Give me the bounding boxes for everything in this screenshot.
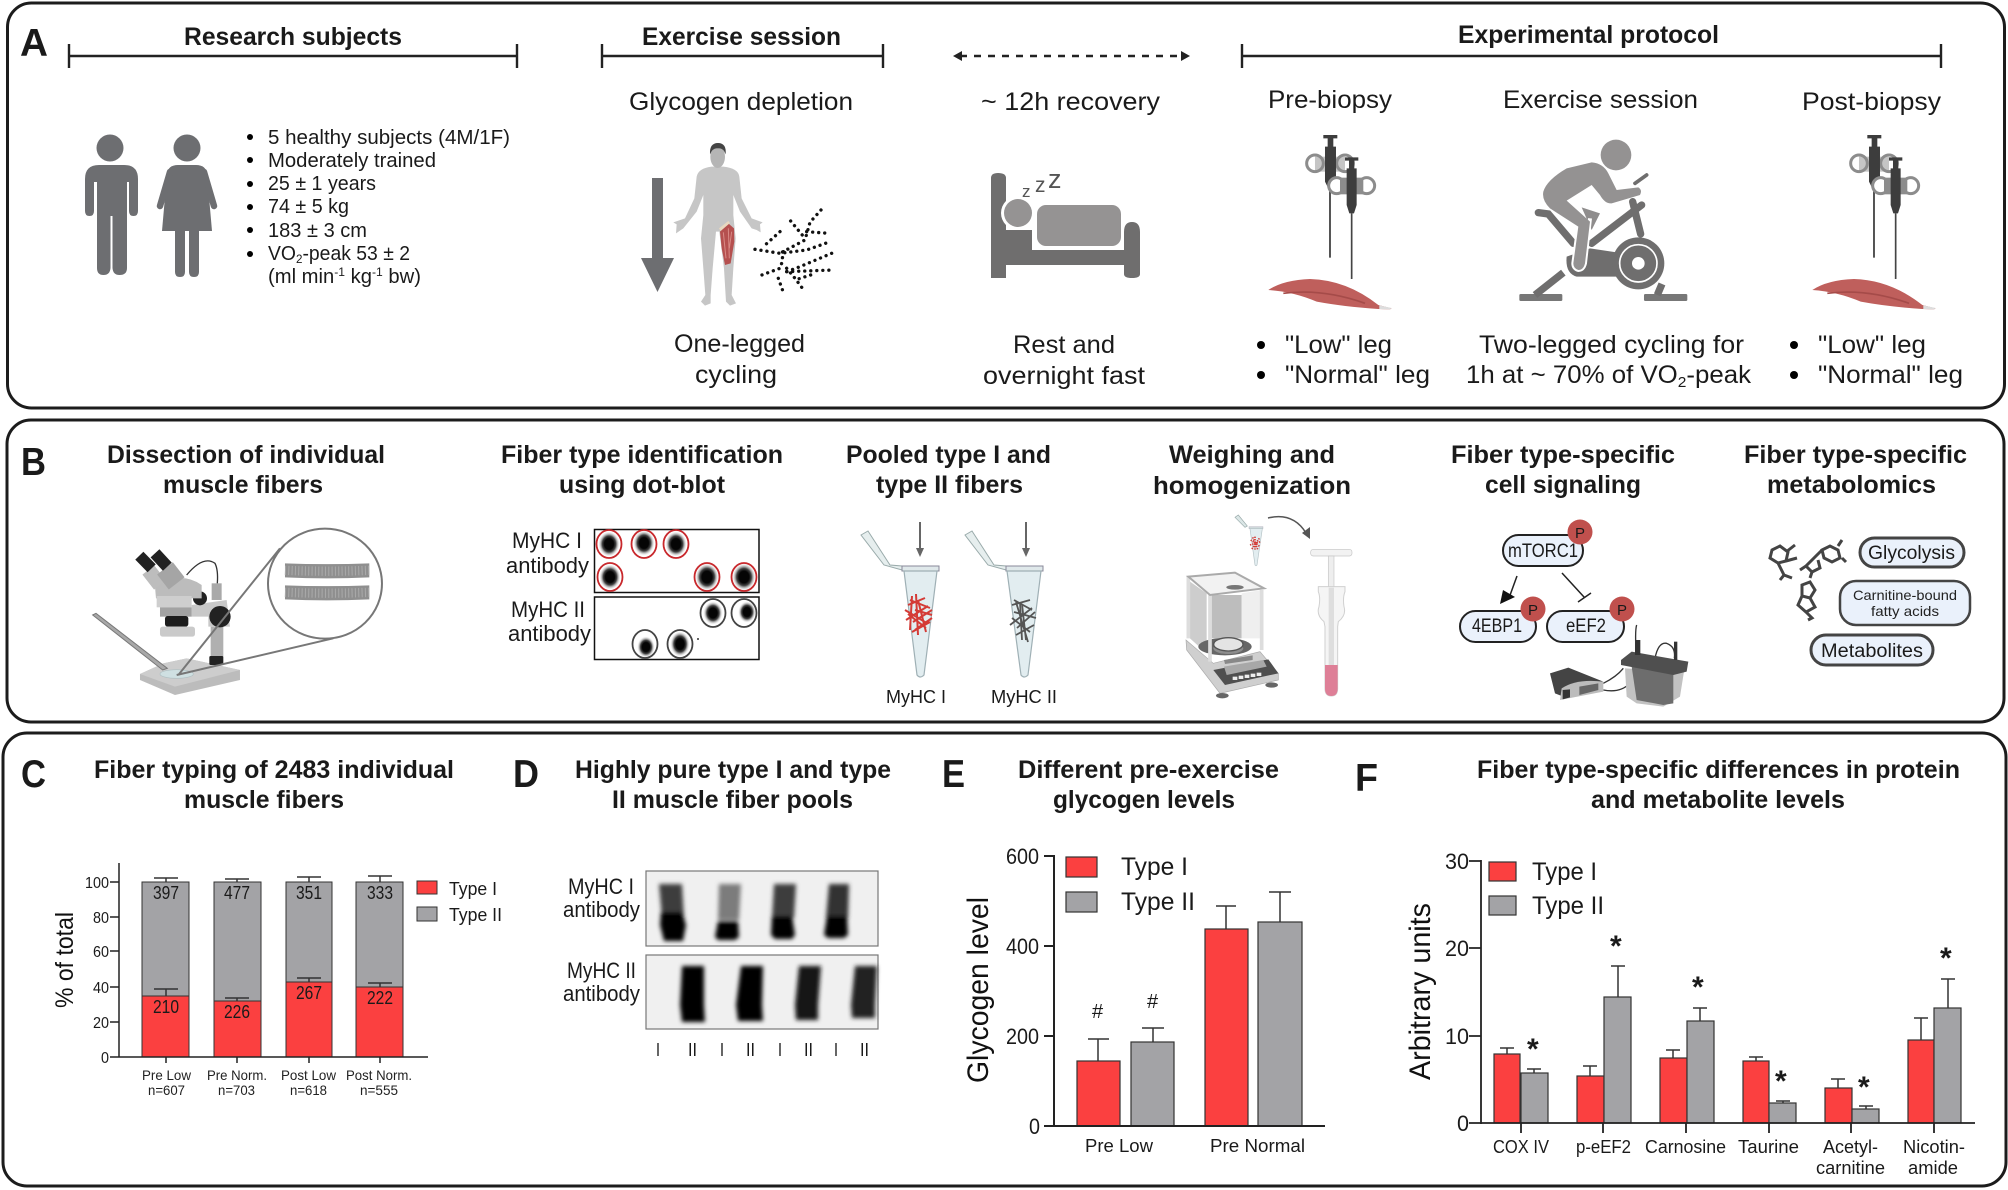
chart: protein and metabolite bars	[1404, 849, 1975, 1178]
bracket: exercise session	[602, 44, 883, 68]
heading: metabolomics: Fiber type-specific	[1744, 441, 1967, 469]
lane labels: II	[746, 1040, 755, 1060]
bracket: research subjects	[69, 44, 517, 68]
icon: sleeping person in bed: z	[1048, 164, 1062, 194]
arrow: glycogen decrease	[641, 178, 674, 292]
heading: cell signaling	[1451, 441, 1675, 499]
significance marks: *	[1610, 930, 1622, 963]
lane labels: I	[834, 1040, 838, 1060]
icon: homogenizer with pink lysate	[1311, 549, 1352, 696]
heading: pure pools: II muscle fiber pools	[612, 786, 853, 814]
y-axis labels: 30	[1445, 849, 1469, 874]
heading: research subjects: Research subjects	[184, 23, 402, 51]
icon: metabolite molecules	[1770, 540, 1846, 620]
dot blot: MyHC I antibody: MyHC I	[512, 528, 582, 553]
y-axis labels: 600	[1006, 844, 1039, 869]
icon: tube with type I fibers: MyHC I	[886, 687, 946, 707]
subject characteristics list: (ml min	[268, 266, 334, 288]
icon: western blot equipment	[1550, 625, 1688, 707]
icon: analytical balance	[1186, 573, 1278, 698]
panel letter F: F	[1355, 757, 1378, 800]
dot blot: MyHC II antibody	[508, 597, 759, 660]
legend: Type II	[1532, 892, 1604, 920]
heading: fiber type identification: using dot-blot	[559, 471, 726, 499]
subject characteristics list: VO	[268, 243, 297, 265]
x-axis labels	[1085, 1136, 1305, 1156]
axes	[1469, 860, 1975, 1133]
western blot: MyHC I: MyHC I	[568, 874, 634, 899]
lane labels: II	[804, 1040, 813, 1060]
x-axis labels: amide	[1908, 1158, 1958, 1178]
subject characteristics list	[247, 127, 510, 288]
signaling diagram	[1460, 520, 1634, 642]
caption: two-legged cycling: 1h at ~ 70% of VO	[1466, 361, 1671, 389]
lane labels	[656, 1040, 869, 1060]
icon: small tube with fibers	[1235, 515, 1263, 566]
x-axis labels: n=607	[148, 1082, 185, 1098]
error bars	[1500, 966, 1955, 1109]
label: exercise session protocol: Exercise session	[1503, 86, 1698, 114]
x-axis labels: COX IV	[1493, 1137, 1549, 1157]
y-axis labels: 10	[1445, 1024, 1469, 1049]
subject characteristics list: 183 ± 3 cm	[268, 220, 367, 242]
heading: weighing and homogenization: Weighing and	[1169, 441, 1335, 469]
chart: stacked bars of fiber type share	[51, 863, 502, 1098]
heading: dissection: Dissection of individual	[107, 441, 385, 469]
heading: pooled fibers: type II fibers	[876, 471, 1023, 499]
caption: one-legged cycling: One-legged	[674, 330, 805, 358]
x-axis labels: Pre Low	[1085, 1136, 1154, 1156]
heading: weighing and homogenization	[1153, 441, 1351, 500]
western blot: MyHC II: antibody	[563, 981, 640, 1006]
node: eEF2: eEF2	[1566, 616, 1606, 637]
list: post-biopsy legs: "Normal" leg	[1818, 361, 1963, 389]
icon: dissection microscope with magnified fibers	[93, 529, 382, 695]
x-axis labels: Acetyl-	[1823, 1137, 1878, 1157]
arrow: activation	[1500, 576, 1517, 604]
lane labels: I	[720, 1040, 724, 1060]
legend: Type I	[449, 879, 497, 899]
x-axis labels: p-eEF2	[1576, 1137, 1631, 1157]
x-axis labels: n=618	[290, 1082, 327, 1098]
y-axis labels: 0	[1457, 1111, 1469, 1136]
caption: two-legged cycling	[1466, 331, 1752, 391]
icon: sleeping person in bed: z	[1035, 174, 1046, 197]
heading: dissection	[107, 441, 385, 499]
icon: male subject	[85, 134, 138, 275]
heading: fiber typing	[94, 756, 454, 814]
bar value labels: 351	[296, 883, 322, 903]
bar value labels: 397	[153, 883, 179, 903]
y-axis labels: 400	[1006, 934, 1039, 959]
y-axis labels: 200	[1006, 1024, 1039, 1049]
list: post-biopsy legs	[1790, 331, 1963, 389]
heading: cell signaling: Fiber type-specific	[1451, 441, 1675, 469]
y-axis labels: 0	[101, 1050, 109, 1067]
western blot: MyHC II	[563, 955, 878, 1029]
western blot: MyHC I: antibody	[563, 897, 640, 922]
y-axis title: Arbitrary units	[1404, 903, 1437, 1080]
dot blot: MyHC I antibody	[506, 528, 759, 592]
heading: fiber type identification	[501, 441, 783, 499]
label: glycogen depletion: Glycogen depletion	[629, 88, 853, 116]
bars	[1077, 922, 1302, 1126]
heading: glycogen: glycogen levels	[1053, 786, 1235, 814]
significance marks: *	[1692, 971, 1704, 1004]
subject characteristics list: -1	[372, 265, 383, 279]
node: mTORC1	[1503, 520, 1592, 566]
list: pre-biopsy legs: "Low" leg	[1285, 331, 1392, 359]
node: 4EBP1: 4EBP1	[1472, 616, 1522, 637]
pill: Metabolites	[1811, 635, 1933, 665]
stacked bars	[142, 882, 403, 1057]
heading: glycogen	[1018, 756, 1279, 814]
heading: pure pools	[575, 756, 891, 814]
significance marks: *	[1527, 1033, 1539, 1066]
x-axis labels: Nicotin-	[1903, 1137, 1965, 1157]
panel letter D: D	[513, 753, 539, 796]
bar value labels	[153, 883, 393, 1022]
y-axis labels: 60	[93, 944, 109, 961]
node: mTORC1: P	[1575, 525, 1585, 542]
legend: Type I	[1121, 853, 1188, 881]
panel letter E: E	[942, 753, 965, 796]
heading: pure pools: Highly pure type I and type	[575, 756, 891, 784]
icon: tube with type I fibers	[861, 522, 946, 707]
icon: biopsy needles and muscle, pre	[1268, 135, 1392, 309]
pill: carnitine-bound fatty acids	[1840, 581, 1970, 625]
heading: exercise session: Exercise session	[642, 23, 841, 51]
heading: weighing and homogenization: homogenization	[1153, 472, 1351, 500]
lane labels: I	[778, 1040, 782, 1060]
significance marks: #	[1092, 1001, 1104, 1023]
icon: glycogen molecule	[755, 210, 833, 292]
panel letter C: C	[21, 753, 46, 796]
heading: fiber typing: muscle fibers	[184, 786, 344, 814]
x-axis labels: Post Norm.	[346, 1067, 412, 1083]
legend	[1489, 858, 1604, 920]
node: eEF2	[1547, 596, 1634, 642]
label: recovery: ~ 12h recovery	[981, 88, 1161, 116]
axes	[1044, 855, 1325, 1127]
icon: sleeping person in bed: z	[1022, 182, 1030, 201]
bar value labels: 477	[224, 883, 250, 903]
subject characteristics list: -1	[334, 265, 345, 279]
list: pre-biopsy legs: "Normal" leg	[1285, 361, 1430, 389]
subject characteristics list: 5 healthy subjects (4M/1F)	[268, 127, 510, 149]
heading: glycogen: Different pre-exercise	[1018, 756, 1279, 784]
bars: type I	[1494, 1040, 1934, 1123]
caption: two-legged cycling: -peak	[1686, 361, 1752, 389]
x-axis labels	[1493, 1137, 1965, 1178]
panel C to F: results	[3, 733, 2006, 1186]
error bars	[154, 876, 392, 1001]
x-axis labels: Post Low	[281, 1067, 337, 1083]
y-axis labels: 0	[1029, 1114, 1040, 1139]
caption: two-legged cycling: 2	[1678, 374, 1686, 391]
lane labels: II	[688, 1040, 697, 1060]
subject characteristics list: kg	[345, 266, 372, 288]
heading: metabolomics	[1744, 441, 1967, 499]
y-axis labels: 20	[93, 1015, 109, 1032]
significance marks: *	[1858, 1071, 1870, 1104]
icon: tube with type II fibers	[965, 522, 1057, 707]
x-axis labels: n=703	[218, 1082, 255, 1098]
caption: one-legged cycling: cycling	[695, 361, 777, 389]
y-axis title: Glycogen level	[962, 897, 995, 1083]
pill: Glycolysis	[1860, 538, 1964, 567]
icon: biopsy needles and muscle, post	[1812, 135, 1936, 309]
node: eEF2: P	[1617, 602, 1627, 619]
heading: fiber type identification: Fiber type identification	[501, 441, 783, 469]
dot blot: MyHC II antibody: MyHC II	[511, 597, 585, 622]
heading: fiber typing: Fiber typing of 2483 individual	[94, 756, 454, 784]
x-axis labels: carnitine	[1816, 1158, 1885, 1178]
list: post-biopsy legs: "Low" leg	[1818, 331, 1926, 359]
heading: fiber type-specific differences: Fiber type-specific differences in protein	[1477, 756, 1960, 784]
inhibition line	[1562, 573, 1591, 602]
x-axis labels: Carnosine	[1645, 1137, 1726, 1157]
icon: sleeping person in bed	[991, 164, 1140, 278]
legend	[417, 879, 502, 925]
caption: rest and overnight fast	[983, 331, 1145, 390]
y-axis labels: 40	[93, 980, 109, 997]
subject characteristics list: 74 ± 5 kg	[268, 196, 349, 218]
y-axis labels	[1445, 849, 1469, 1136]
heading: pooled fibers	[846, 441, 1051, 499]
panel A: study design	[8, 3, 2004, 408]
x-axis labels: n=555	[360, 1082, 398, 1098]
lane labels: I	[656, 1040, 660, 1060]
icon: tube with type II fibers: MyHC II	[991, 687, 1057, 707]
panel B: sample processing	[7, 420, 2004, 722]
dot blot: MyHC II antibody: antibody	[508, 621, 591, 646]
icon: human figure with exercised leg	[673, 143, 763, 306]
node: 4EBP1: P	[1528, 602, 1538, 619]
arrow: transfer to homogenizer	[1268, 517, 1310, 539]
significance marks: *	[1940, 942, 1952, 975]
lane labels: II	[860, 1040, 869, 1060]
node: mTORC1: mTORC1	[1508, 541, 1578, 562]
chart: glycogen level bars	[962, 844, 1325, 1156]
western blot: MyHC II: MyHC II	[567, 958, 636, 983]
y-axis labels: 80	[93, 910, 109, 927]
list: pre-biopsy legs	[1257, 331, 1430, 389]
panel letter B: B	[21, 441, 46, 484]
panel letter A: A	[20, 22, 48, 65]
subject characteristics list: 25 ± 1 years	[268, 173, 376, 195]
heading: dissection: muscle fibers	[163, 471, 323, 499]
western blot: MyHC I	[563, 871, 878, 946]
x-axis labels: Pre Low	[142, 1067, 192, 1083]
arrow: recovery interval	[953, 51, 1190, 61]
error bars	[1088, 892, 1291, 1061]
x-axis labels	[142, 1067, 412, 1098]
pill: Metabolites: Metabolites	[1821, 641, 1923, 662]
caption: one-legged cycling	[674, 330, 805, 389]
significance marks: #	[1147, 991, 1159, 1013]
icon: cyclist on stationary bike	[1519, 140, 1687, 301]
bars: type II	[1521, 997, 1961, 1123]
caption: rest and overnight fast: Rest and	[1013, 331, 1115, 359]
legend: Type I	[1532, 858, 1597, 886]
bar value labels: 210	[153, 997, 179, 1017]
node: 4EBP1	[1460, 596, 1546, 642]
legend: Type II	[1121, 888, 1195, 916]
icon: female subject	[160, 134, 214, 277]
label: post-biopsy: Post-biopsy	[1802, 88, 1942, 116]
bar value labels: 226	[224, 1002, 250, 1022]
x-axis labels: Pre Normal	[1210, 1136, 1305, 1156]
subject characteristics list: -peak 53 ± 2	[302, 243, 410, 265]
legend	[1066, 853, 1195, 916]
label: pre-biopsy: Pre-biopsy	[1268, 86, 1393, 114]
subject characteristics list: bw)	[383, 266, 421, 288]
y-axis labels	[1006, 844, 1040, 1139]
x-axis labels: Taurine	[1738, 1137, 1799, 1157]
caption: two-legged cycling: Two-legged cycling for	[1479, 331, 1744, 359]
dot blot: MyHC I antibody: antibody	[506, 553, 589, 578]
heading: pooled fibers: Pooled type I and	[846, 441, 1051, 469]
x-axis labels: Pre Norm.	[207, 1067, 267, 1083]
heading: metabolomics: metabolomics	[1767, 471, 1936, 499]
significance marks: *	[1775, 1065, 1787, 1098]
y-axis labels	[85, 875, 109, 1067]
caption: rest and overnight fast: overnight fast	[983, 362, 1145, 390]
heading: cell signaling: cell signaling	[1485, 471, 1641, 499]
bar value labels: 267	[296, 983, 322, 1003]
bar value labels: 333	[367, 883, 393, 903]
subject characteristics list: Moderately trained	[268, 150, 436, 172]
significance marks	[1092, 991, 1159, 1023]
pill: carnitine-bound fatty acids: fatty acids	[1871, 603, 1939, 619]
axes	[110, 863, 428, 1063]
y-axis title: % of total	[51, 912, 79, 1008]
y-axis labels: 100	[85, 875, 109, 892]
bracket: experimental protocol	[1242, 44, 1941, 68]
pill: carnitine-bound fatty acids: Carnitine-bound	[1853, 587, 1957, 603]
y-axis labels: 20	[1445, 936, 1469, 961]
heading: fiber type-specific differences	[1477, 756, 1960, 814]
heading: experimental protocol: Experimental protocol	[1458, 21, 1719, 49]
bar value labels: 222	[367, 988, 393, 1008]
pill: Glycolysis: Glycolysis	[1868, 543, 1955, 564]
subject characteristics list: 2	[296, 252, 303, 266]
legend: Type II	[449, 905, 502, 925]
heading: fiber type-specific differences: and metabolite levels	[1591, 786, 1845, 814]
significance marks	[1527, 930, 1952, 1104]
